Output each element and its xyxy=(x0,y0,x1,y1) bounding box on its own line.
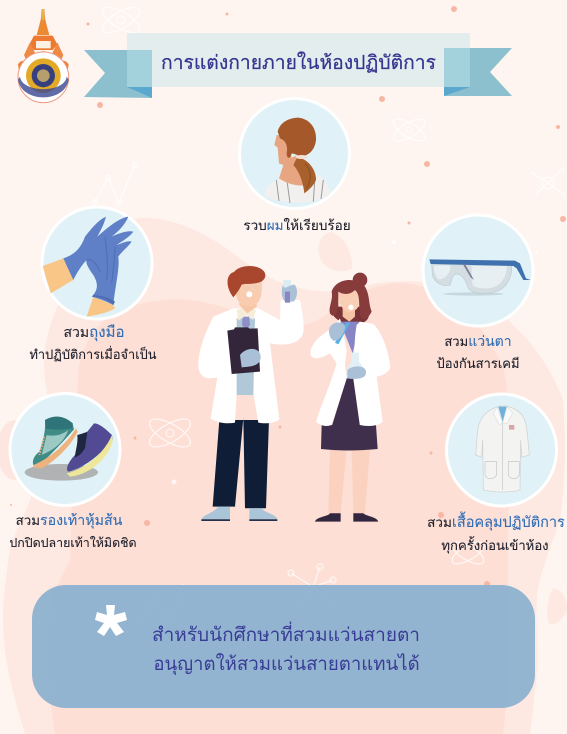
icon: blue gloves xyxy=(42,207,152,319)
panel: gloves xyxy=(29,207,157,362)
icon: tied hair xyxy=(240,98,350,208)
panel: lab coat xyxy=(427,394,565,554)
shoes label xyxy=(9,513,137,550)
scientist: woman xyxy=(310,273,390,522)
gloves label: สวมถุงมือ xyxy=(64,324,124,342)
goggles label: สวมแว่นตา xyxy=(444,333,512,349)
lab coat label: ทุกครั้งก่อนเข้าห้อง xyxy=(441,535,549,554)
callout: note on prescription glasses xyxy=(32,585,535,708)
callout text: สำหรับนักศึกษาที่สวมแว่นสายตา xyxy=(152,621,420,646)
ribbon band xyxy=(127,33,470,87)
goggles label: ป้องกันสารเคมี xyxy=(436,356,520,371)
panel: hair xyxy=(240,98,351,233)
goggles label xyxy=(436,333,520,371)
shoes label: สวมรองเท้าหุ้มส้น xyxy=(16,513,123,529)
lab coat label xyxy=(427,511,565,554)
panel: shoes xyxy=(9,394,137,550)
ribbon left tail xyxy=(84,50,152,98)
hair label: รวบผมให้เรียบร้อย xyxy=(243,217,351,233)
callout text xyxy=(152,621,420,676)
panel: safety goggles xyxy=(423,215,533,371)
callout text: อนุญาตให้สวมแว่นสายตาแทนได้ xyxy=(153,653,420,676)
icon: lab coat xyxy=(446,394,556,506)
icon: asterisk xyxy=(95,605,127,636)
logo: university emblem xyxy=(18,9,69,103)
scientist: man xyxy=(198,266,304,521)
ribbon folds xyxy=(127,48,470,98)
callout panel xyxy=(32,585,535,708)
title text: การแต่งกายภายในห้องปฏิบัติการ xyxy=(161,51,436,74)
gloves label: ทำปฏิบัติการเมื่อจำเป็น xyxy=(29,346,157,362)
illustration: two scientists xyxy=(198,266,390,522)
icon: closed-toe shoes xyxy=(10,394,120,506)
icon: safety goggles xyxy=(423,215,533,326)
gloves label xyxy=(29,324,157,362)
background blobs xyxy=(0,218,567,734)
ribbon right tail xyxy=(444,48,512,96)
title ribbon xyxy=(84,33,512,98)
lab coat label: สวมเสื้อคลุมปฏิบัติการ xyxy=(427,511,565,531)
shoes label: ปกปิดปลายเท้าให้มิดชิด xyxy=(9,536,137,550)
